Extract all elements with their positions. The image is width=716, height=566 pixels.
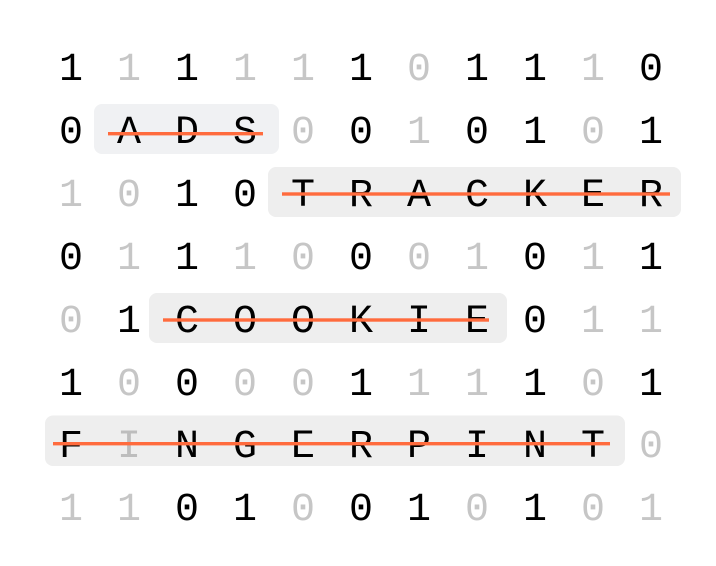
binary row 4: 1 bbox=[117, 237, 141, 282]
struck-out word: TRACKER bbox=[268, 167, 681, 219]
struck-out word: FINGERPINT: N bbox=[175, 425, 199, 470]
struck-out word: ADS: S bbox=[233, 111, 257, 156]
binary row 2 digits: 1 bbox=[407, 111, 431, 156]
binary row 4: 0 bbox=[291, 237, 315, 282]
struck-out word: ADS: A bbox=[117, 111, 141, 156]
binary row 5 digits: 1 bbox=[581, 300, 605, 345]
binary row 1: 1 bbox=[291, 48, 315, 93]
binary row 4: 1 bbox=[639, 237, 663, 282]
struck-out word: FINGERPINT: I bbox=[465, 425, 489, 470]
binary row 4: 1 bbox=[465, 237, 489, 282]
struck-out word: FINGERPINT bbox=[45, 416, 625, 470]
struck-out word: COOKIE: C bbox=[175, 300, 199, 345]
struck-out word: FINGERPINT: N bbox=[523, 425, 547, 470]
binary row 2 digits: 0 bbox=[291, 111, 315, 156]
binary row 3 digits: 1 bbox=[59, 174, 83, 219]
binary row 6: 0 bbox=[581, 363, 605, 408]
binary row 8: 1 bbox=[639, 488, 663, 533]
binary row 1 bbox=[59, 48, 663, 93]
binary row 4 bbox=[59, 237, 663, 282]
struck-out word: FINGERPINT: P bbox=[407, 425, 431, 470]
struck-out word: TRACKER: R bbox=[639, 174, 663, 219]
struck-out word: COOKIE: E bbox=[465, 300, 489, 345]
binary row 1: 0 bbox=[407, 48, 431, 93]
struck-out word: COOKIE: K bbox=[349, 300, 373, 345]
struck-out word: TRACKER: A bbox=[407, 174, 431, 219]
struck-out word: COOKIE bbox=[149, 293, 507, 345]
binary row 5 digits bbox=[59, 300, 663, 345]
struck-out word: TRACKER: T bbox=[291, 174, 315, 219]
binary row 1: 1 bbox=[59, 48, 83, 93]
binary row 8: 1 bbox=[117, 488, 141, 533]
binary row 2 digits: 1 bbox=[523, 111, 547, 156]
struck-out word: FINGERPINT: F bbox=[59, 425, 83, 470]
struck-out word: TRACKER: C bbox=[465, 174, 489, 219]
binary row 8: 0 bbox=[465, 488, 489, 533]
binary row 5 digits: 0 bbox=[59, 300, 83, 345]
binary row 5 digits: 0 bbox=[523, 300, 547, 345]
binary row 8 bbox=[59, 488, 663, 533]
binary row 2 digits: 1 bbox=[639, 111, 663, 156]
binary row 4: 0 bbox=[59, 237, 83, 282]
binary row 5 digits: 1 bbox=[117, 300, 141, 345]
binary row 3 digits: 0 bbox=[233, 174, 257, 219]
binary row 1: 1 bbox=[581, 48, 605, 93]
binary row 3 digits bbox=[59, 174, 257, 219]
binary row 6: 1 bbox=[465, 363, 489, 408]
binary row 6: 1 bbox=[59, 363, 83, 408]
struck-out word: TRACKER: R bbox=[349, 174, 373, 219]
binary row 5 digits: 1 bbox=[639, 300, 663, 345]
binary row 6: 1 bbox=[349, 363, 373, 408]
binary row 6: 1 bbox=[407, 363, 431, 408]
binary row 2 digits: 0 bbox=[349, 111, 373, 156]
binary row 3 digits: 0 bbox=[117, 174, 141, 219]
binary row 8: 1 bbox=[233, 488, 257, 533]
binary row 6: 0 bbox=[175, 363, 199, 408]
struck-out word: FINGERPINT: T bbox=[581, 425, 605, 470]
struck-out word: FINGERPINT: I bbox=[117, 425, 141, 470]
binary row 8: 0 bbox=[291, 488, 315, 533]
binary row 3 digits: 1 bbox=[175, 174, 199, 219]
struck-out word: FINGERPINT: E bbox=[291, 425, 315, 470]
binary row 2 digits: 0 bbox=[581, 111, 605, 156]
binary row 6: 1 bbox=[523, 363, 547, 408]
binary row 1: 1 bbox=[175, 48, 199, 93]
binary row 1: 0 bbox=[639, 48, 663, 93]
binary row 1: 1 bbox=[523, 48, 547, 93]
binary row 8: 1 bbox=[59, 488, 83, 533]
binary row 8: 1 bbox=[523, 488, 547, 533]
binary row 6: 0 bbox=[291, 363, 315, 408]
binary row 4: 1 bbox=[175, 237, 199, 282]
binary row 2 digits: 0 bbox=[59, 111, 83, 156]
binary row 4: 0 bbox=[523, 237, 547, 282]
binary row 4: 1 bbox=[581, 237, 605, 282]
struck-out word: COOKIE: I bbox=[407, 300, 431, 345]
binary row 8: 1 bbox=[407, 488, 431, 533]
struck-out word: TRACKER: K bbox=[523, 174, 547, 219]
binary row 8: 0 bbox=[581, 488, 605, 533]
struck-out word: FINGERPINT: R bbox=[349, 425, 373, 470]
binary row 7 trailing digit: 0 bbox=[639, 425, 663, 470]
binary row 6 bbox=[59, 363, 663, 408]
binary row 4: 0 bbox=[349, 237, 373, 282]
binary row 4: 1 bbox=[233, 237, 257, 282]
struck-out word: ADS bbox=[94, 104, 279, 156]
struck-out word: ADS: D bbox=[175, 111, 199, 156]
struck-out word: COOKIE: O bbox=[291, 300, 315, 345]
binary row 6: 0 bbox=[117, 363, 141, 408]
binary row 1: 1 bbox=[117, 48, 141, 93]
binary row 6: 0 bbox=[233, 363, 257, 408]
binary row 1: 1 bbox=[233, 48, 257, 93]
struck-out word: COOKIE: O bbox=[233, 300, 257, 345]
binary row 8: 0 bbox=[175, 488, 199, 533]
binary row 2 digits bbox=[59, 111, 663, 156]
binary row 6: 1 bbox=[639, 363, 663, 408]
binary row 1: 1 bbox=[465, 48, 489, 93]
binary row 4: 0 bbox=[407, 237, 431, 282]
struck-out word: FINGERPINT: G bbox=[233, 425, 257, 470]
struck-out word: TRACKER: E bbox=[581, 174, 605, 219]
binary row 1: 1 bbox=[349, 48, 373, 93]
binary row 2 digits: 0 bbox=[465, 111, 489, 156]
binary row 8: 0 bbox=[349, 488, 373, 533]
